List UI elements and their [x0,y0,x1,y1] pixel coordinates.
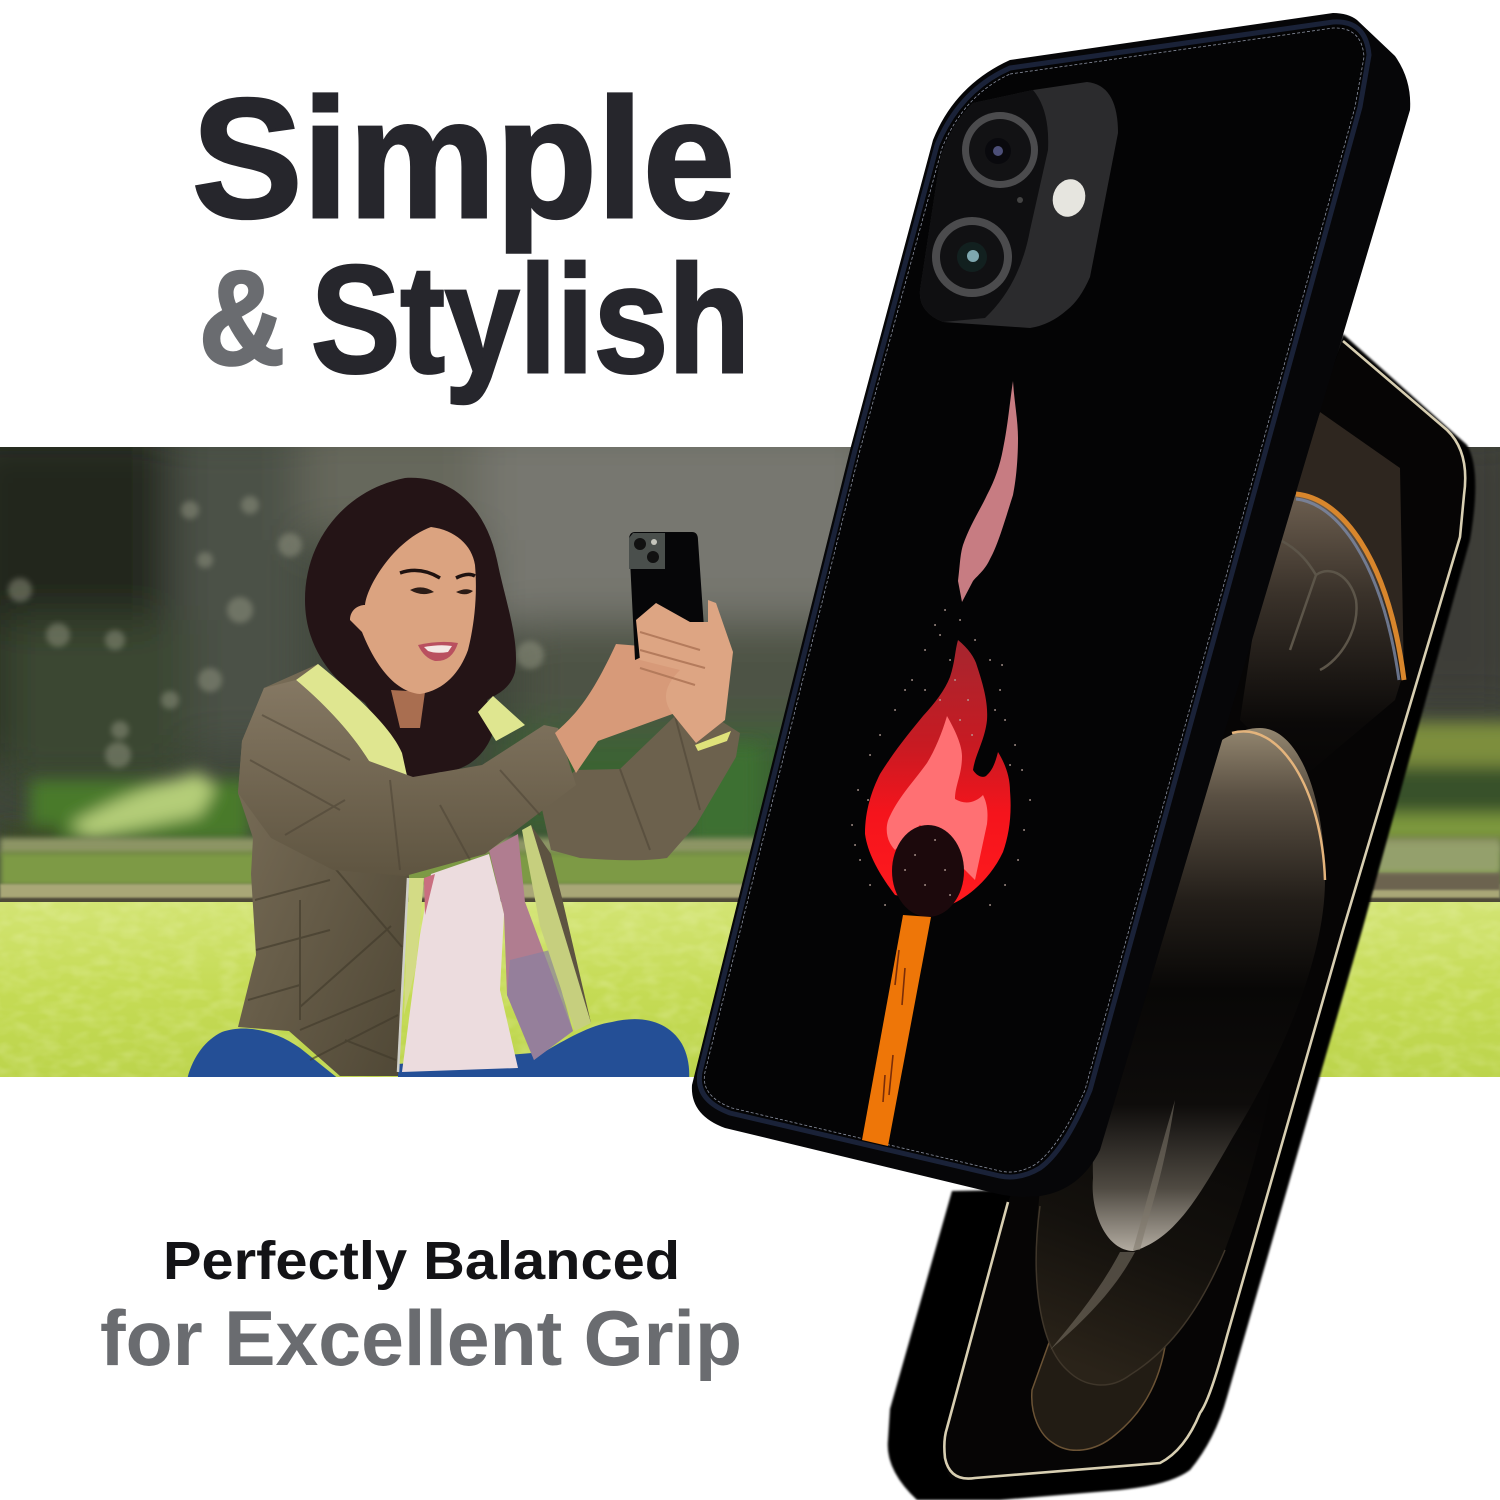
lens housing [920,90,1048,322]
match stick [862,915,931,1146]
smile [418,642,458,661]
hands [636,600,733,743]
subheading: Perfectly Balanced: Perfectly Balanced [163,1231,680,1291]
sleeve folds [250,715,700,870]
wallpaper [1031,412,1406,1451]
case body [692,13,1410,1197]
face [350,527,476,694]
title: ampersand: & [199,244,285,393]
jeans [187,1019,689,1080]
hair back [305,478,516,780]
gold frame [944,341,1465,1479]
subheading: for Excellent Grip: for Excellent Grip [100,1294,742,1382]
spark particles [852,610,1030,905]
inner flame [887,716,988,880]
large lower orb [1093,728,1325,1251]
front phone case [692,13,1410,1197]
near sleeve [238,680,576,876]
lower lens [932,217,1012,297]
top orb with rainbow [1242,494,1402,714]
stitched inner line [704,28,1364,1172]
navy rim [699,22,1369,1177]
third orb [1037,1164,1241,1346]
camera module [920,82,1118,328]
held phone [629,532,704,660]
eyebrows and eyes [400,570,475,578]
center swirl lines [1280,540,1357,670]
plaid overshirt [489,834,573,1060]
far arm sleeve [540,714,740,860]
bokeh highlights [8,496,544,768]
flame [865,640,1011,906]
zip [398,878,408,1072]
green hedge, lit slope and right hedge [0,722,1500,845]
photo band: park background [0,420,1500,1080]
microphone [1017,197,1023,203]
right jacket panel and lining [531,825,591,1023]
jacket torso [238,664,409,1076]
light wedge [1050,1100,1175,1350]
match artwork [852,381,1030,1146]
smoke wisp [958,381,1018,602]
upper lens [962,112,1038,188]
neck [391,690,425,728]
title: Stylish: Stylish [311,234,750,405]
near forearm [555,644,680,773]
left lining [404,878,424,1015]
collar [296,664,525,785]
fourth orb [1031,1342,1166,1451]
quilting lines on torso [248,866,402,1060]
back phone with gold bezel [888,334,1480,1500]
lawn and path [0,838,1500,1078]
woman taking a selfie [187,478,740,1080]
case [888,334,1475,1500]
notch wall [1296,412,1404,658]
flash [1048,175,1090,221]
title: Simple: Simple [192,64,735,254]
match head [892,825,964,917]
shirt [402,854,518,1072]
wrist band [695,731,731,751]
